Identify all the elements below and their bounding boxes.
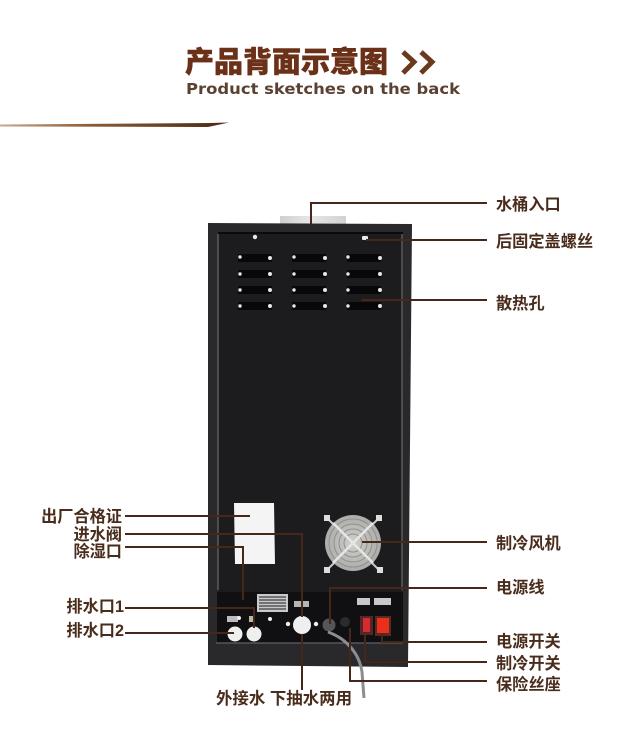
power and cooling switches bbox=[360, 616, 373, 635]
leader: fuse holder bbox=[350, 628, 487, 681]
water inlet cylinder bbox=[280, 216, 346, 224]
icon: double chevron bbox=[403, 52, 432, 73]
warning plate bbox=[257, 594, 288, 612]
label: certificate: 出厂合格证 bbox=[41, 507, 122, 526]
leader: power switch bbox=[382, 634, 487, 642]
header rule bbox=[0, 122, 229, 127]
leader: certificate bbox=[125, 515, 250, 517]
label: drain 1: 排水口1 bbox=[66, 598, 124, 616]
label: drain 2: 排水口2 bbox=[66, 622, 124, 640]
cooling fan bbox=[324, 515, 383, 573]
certificate sticker bbox=[234, 503, 275, 564]
leader: power cord bbox=[330, 588, 487, 624]
label: inlet valve: 进水阀 bbox=[73, 526, 122, 544]
title: 产品背面示意图 bbox=[185, 45, 388, 79]
label: cooling switch: 制冷开关 bbox=[496, 654, 561, 673]
label: water inlet: 水桶入口 bbox=[496, 195, 561, 214]
leader: external water bbox=[301, 634, 303, 690]
label: cooling fan: 制冷风机 bbox=[496, 534, 561, 553]
label: fuse holder: 保险丝座 bbox=[496, 675, 561, 694]
leader: vents bbox=[362, 299, 487, 301]
label: vents: 散热孔 bbox=[496, 295, 545, 313]
power cord socket bbox=[322, 618, 336, 632]
label: rear screw: 后固定盖螺丝 bbox=[496, 232, 593, 251]
subtitle: Product sketches on the back bbox=[186, 80, 461, 98]
leader: water inlet bbox=[311, 203, 487, 224]
leader: drain 1 bbox=[125, 608, 254, 628]
machine back cabinet bbox=[208, 223, 412, 667]
label: external water: 外接水 下抽水两用 bbox=[216, 689, 352, 708]
power cord bbox=[328, 632, 364, 698]
screw holes bbox=[253, 235, 368, 240]
drain ports bbox=[228, 616, 318, 642]
leader: rear screw bbox=[366, 239, 487, 241]
leader: cooling fan bbox=[362, 541, 487, 543]
leader: dehumidifier port bbox=[125, 547, 243, 600]
label: power switch: 电源开关 bbox=[496, 632, 561, 651]
label: power cord: 电源线 bbox=[496, 578, 545, 597]
label: dehumidifier port: 除湿口 bbox=[73, 542, 122, 561]
leader: cooling switch bbox=[365, 634, 487, 662]
vent grid bbox=[238, 254, 382, 310]
leader: inlet valve bbox=[125, 534, 302, 617]
lower control panel bbox=[216, 592, 403, 643]
leader: drain 2 bbox=[125, 632, 234, 634]
